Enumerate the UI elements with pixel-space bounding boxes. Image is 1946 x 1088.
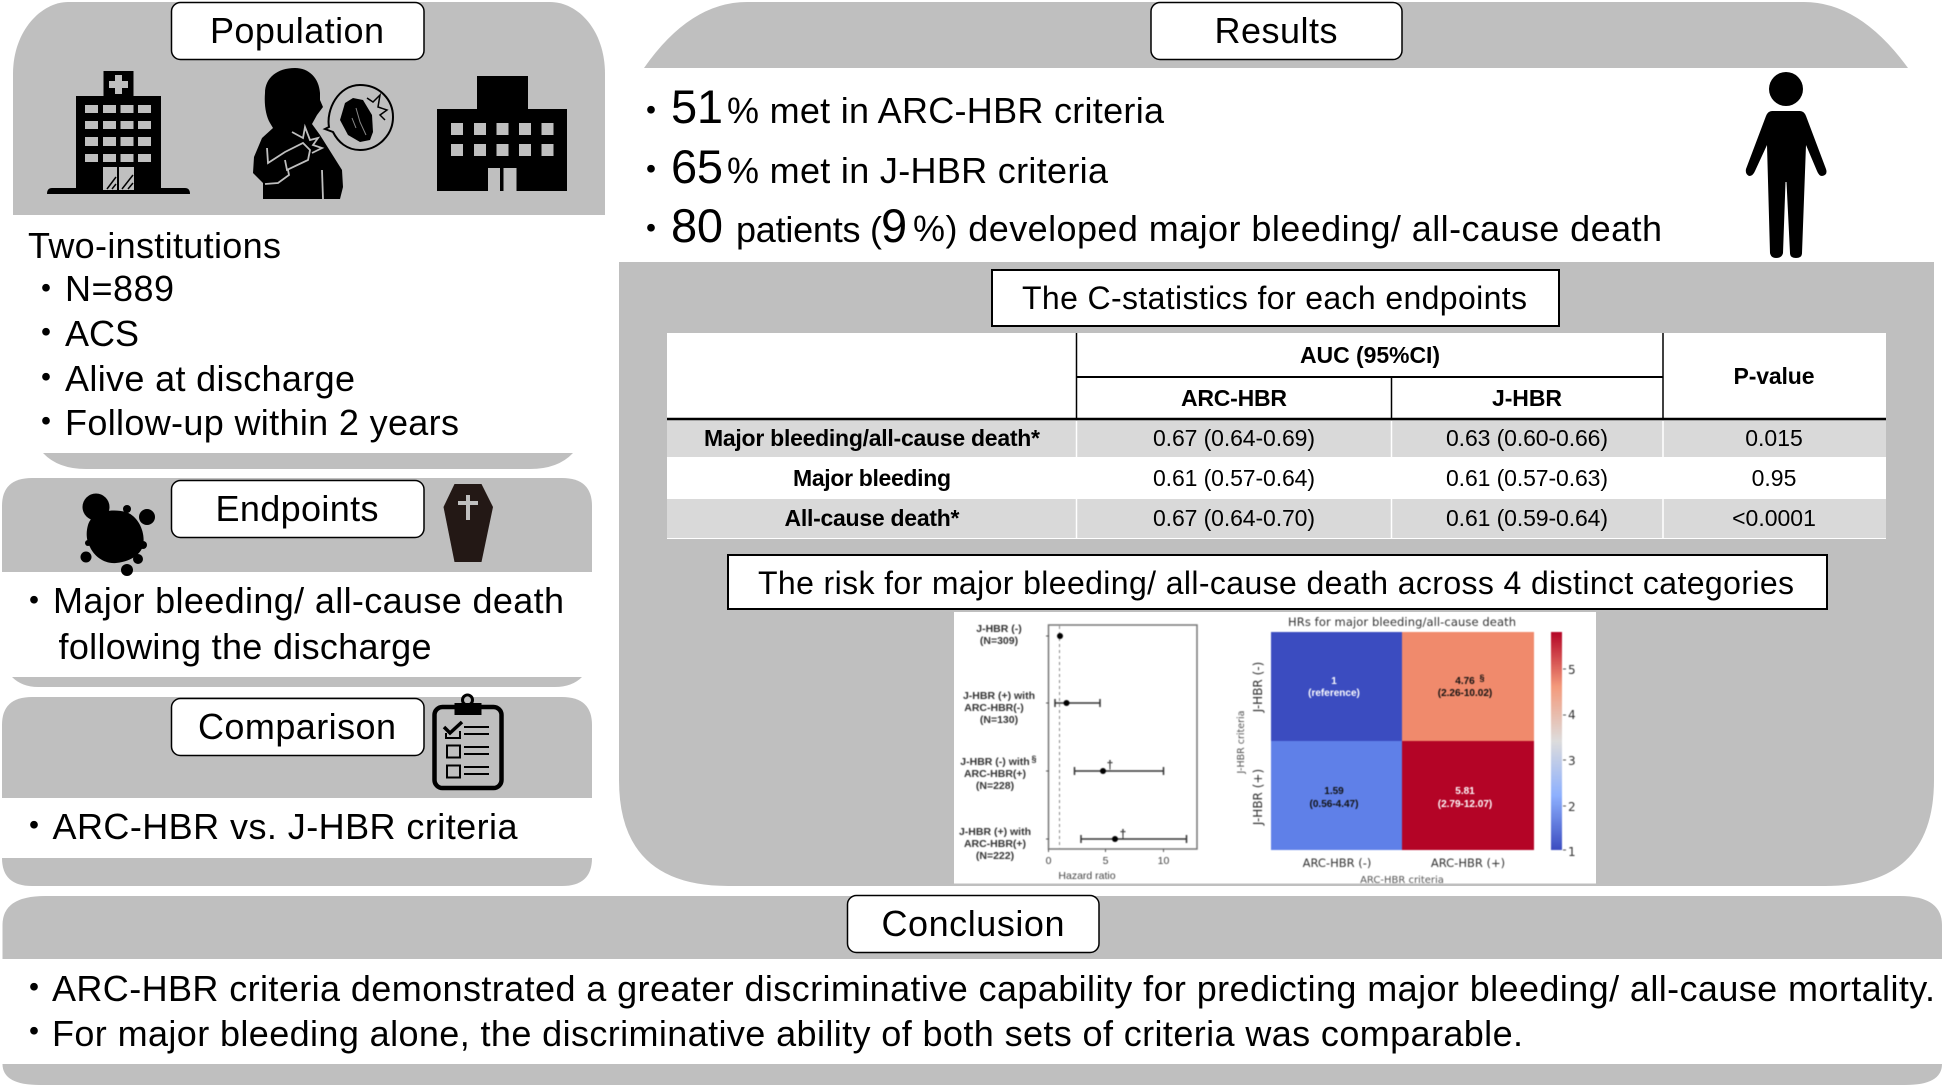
comparison heading <box>172 698 424 756</box>
risk heading <box>728 555 1827 609</box>
results statistics: ・ <box>633 82 669 134</box>
table: C-statistics: J-HBR <box>1492 385 1562 411</box>
endpoints text: Major bleeding/ all-cause death <box>53 580 564 621</box>
heatmap: HRs for major bleeding/all-cause death: 5.81 <box>1455 786 1475 797</box>
comparison text: ・ <box>16 797 52 849</box>
population details: N=889 <box>65 268 174 309</box>
colour bar: 5 <box>1568 663 1576 677</box>
whiskers <box>1055 699 1186 843</box>
forest plot: hazard ratios: ARC-HBR(+) <box>964 838 1026 850</box>
forest plot: hazard ratios: (N=309) <box>980 635 1018 647</box>
comparison footer band <box>2 858 592 886</box>
colour bar: 2 <box>1568 800 1576 814</box>
icon: clipboard checklist <box>434 695 502 788</box>
results statistics: 9 <box>881 199 907 252</box>
table: C-statistics: All-cause death* <box>784 505 960 531</box>
results statistics: % met in J-HBR criteria <box>727 150 1109 191</box>
table: C-statistics: 0.67 (0.64-0.70) <box>1153 505 1315 531</box>
icon: person <box>1746 72 1826 258</box>
population details: ・ <box>28 393 64 445</box>
table: C-statistics: P-value <box>1734 363 1814 389</box>
heatmap cells <box>1271 632 1534 850</box>
results statistics: ・ <box>633 200 669 252</box>
heatmap: HRs for major bleeding/all-cause death: (0.56-4.47) <box>1310 799 1358 810</box>
forest plot: hazard ratios: † <box>1107 758 1113 772</box>
forest plot: hazard ratios: J-HBR (+) with <box>959 826 1031 838</box>
forest plot: hazard ratios: 5 <box>1103 855 1109 867</box>
endpoints heading: Endpoints <box>216 488 378 529</box>
comparison text: ARC-HBR vs. J-HBR criteria <box>52 806 518 847</box>
forest plot: hazard ratios: (N=228) <box>976 780 1014 792</box>
heatmap: HRs for major bleeding/all-cause death: (2.26-10.02) <box>1438 688 1492 699</box>
conclusion text: ARC-HBR criteria demonstrated a greater discriminative capability for predicting major bleeding/ all-cause mortality. <box>52 968 1935 1009</box>
population heading: Population <box>210 10 384 51</box>
endpoints footer band <box>12 677 582 687</box>
endpoints text: ・ <box>16 572 52 624</box>
results statistics: 65 <box>671 140 723 193</box>
results heading: Results <box>1214 10 1338 51</box>
icon: blood splatter <box>80 494 155 576</box>
forest plot: hazard ratios: † <box>1120 827 1126 841</box>
endpoints text <box>16 572 564 667</box>
comparison heading: Comparison <box>198 706 396 747</box>
panel: comparison <box>2 695 592 886</box>
conclusion text: ・ <box>16 1003 52 1055</box>
heatmap: HRs for major bleeding/all-cause death: (2.79-12.07) <box>1438 799 1492 810</box>
forest plot: hazard ratios: 10 <box>1158 855 1169 867</box>
table: C-statistics: 0.61 (0.57-0.63) <box>1446 465 1608 491</box>
icon: institution building <box>437 76 567 191</box>
results statistics: 51 <box>671 80 723 133</box>
comparison header band <box>2 697 592 798</box>
heatmap: HRs for major bleeding/all-cause death: § <box>1479 673 1485 683</box>
heatmap axis labels: J-HBR (-) <box>1251 662 1265 713</box>
forest plot: hazard ratios: (N=130) <box>980 714 1018 726</box>
conclusion header band <box>2 896 1942 959</box>
panel: conclusion <box>2 896 1942 1085</box>
colour bar: 3 <box>1568 754 1576 768</box>
heatmap title: HRs for major bleeding/all-cause death <box>1288 615 1516 629</box>
figure background <box>954 612 1596 884</box>
heatmap axis labels: J-HBR (+) <box>1251 769 1265 826</box>
endpoints text: following the discharge <box>58 626 432 667</box>
forest plot: hazard ratios: 0 <box>1046 855 1052 867</box>
forest plot: hazard ratios: Hazard ratio <box>1058 870 1116 882</box>
results heading <box>1151 2 1402 60</box>
icon: coffin <box>444 484 493 562</box>
forest plot: hazard ratios: ARC-HBR(+) <box>964 768 1026 780</box>
risk heading: The risk for major bleeding/ all-cause death across 4 distinct categories <box>758 565 1794 601</box>
conclusion heading <box>848 896 1099 952</box>
table: C-statistics: Major bleeding <box>793 465 951 491</box>
endpoints header band <box>2 478 592 572</box>
heatmap: HRs for major bleeding/all-cause death: 4.76 <box>1455 676 1475 687</box>
table: C-statistics: ARC-HBR <box>1181 385 1287 411</box>
table: C-statistics: 0.95 <box>1752 465 1796 491</box>
icon: patient with chest pain <box>253 68 393 199</box>
forest plot: hazard ratios <box>959 623 1197 882</box>
heatmap: HRs for major bleeding/all-cause death: 1 <box>1331 676 1337 687</box>
heatmap axis labels: ARC-HBR (-) <box>1303 856 1371 870</box>
results statistics: %) developed major bleeding/ all-cause death <box>913 208 1662 249</box>
c-statistics heading <box>992 270 1559 326</box>
conclusion text: For major bleeding alone, the discriminative ability of both sets of criteria was comparable. <box>52 1013 1523 1054</box>
forest plot: hazard ratios: § <box>1031 754 1037 764</box>
table: C-statistics: 0.61 (0.59-0.64) <box>1446 505 1608 531</box>
table: C-statistics: 0.61 (0.57-0.64) <box>1153 465 1315 491</box>
conclusion text: ・ <box>16 959 52 1011</box>
heatmap axis labels: J-HBR criteria <box>1236 711 1247 774</box>
forest plot: hazard ratios: J-HBR (+) with <box>963 690 1035 702</box>
results statistics: ・ <box>633 141 669 193</box>
forest plot: hazard ratios: ARC-HBR(-) <box>964 702 1024 714</box>
colour bar: 4 <box>1568 708 1576 722</box>
forest plot: hazard ratios: J-HBR (-) with <box>960 756 1030 768</box>
population details: ・ <box>28 304 64 356</box>
population details: ACS <box>65 313 139 354</box>
speech bubble <box>325 85 393 150</box>
panel: endpoints <box>2 478 592 687</box>
population footer band <box>43 453 573 469</box>
colour bar: 1 <box>1568 845 1576 859</box>
panel: population <box>13 2 605 469</box>
table: C-statistics: 0.67 (0.64-0.69) <box>1153 425 1315 451</box>
conclusion heading: Conclusion <box>882 903 1064 944</box>
table: C-statistics: AUC (95%CI) <box>1300 342 1440 368</box>
conclusion footer band <box>2 1064 1942 1085</box>
results statistics: % met in ARC-HBR criteria <box>727 90 1165 131</box>
endpoints heading <box>172 480 424 538</box>
population details: Alive at discharge <box>65 358 355 399</box>
results statistics: 80 <box>671 199 723 252</box>
table: C-statistics <box>667 333 1886 539</box>
heatmap: HRs for major bleeding/all-cause death: (reference) <box>1308 688 1360 699</box>
heatmap: HRs for major bleeding/all-cause death <box>1236 615 1576 886</box>
conclusion text <box>16 959 1935 1055</box>
forest plot: hazard ratios: (N=222) <box>976 850 1014 862</box>
plot frame <box>1048 625 1197 849</box>
population details: ・ <box>28 349 64 401</box>
population heading <box>172 2 424 60</box>
table: C-statistics: Major bleeding/all-cause death* <box>704 425 1040 451</box>
forest plot: hazard ratios: J-HBR (-) <box>976 623 1022 635</box>
results statistics <box>633 80 1662 252</box>
heatmap axis labels: ARC-HBR criteria <box>1360 875 1444 886</box>
population details <box>28 225 459 445</box>
heatmap axis labels <box>1236 662 1505 886</box>
table: C-statistics: 0.63 (0.60-0.66) <box>1446 425 1608 451</box>
population details: ・ <box>28 260 64 312</box>
heatmap axis labels: ARC-HBR (+) <box>1431 856 1505 870</box>
results header band <box>644 2 1908 68</box>
heatmap: HRs for major bleeding/all-cause death: 1.59 <box>1324 786 1344 797</box>
icon: hospital with cross <box>47 71 190 194</box>
results statistics: patients ( <box>736 209 882 250</box>
population details: Two-institutions <box>28 225 281 266</box>
c-statistics heading: The C-statistics for each endpoints <box>1022 280 1527 316</box>
colour bar <box>1551 632 1576 859</box>
table: C-statistics: 0.015 <box>1745 425 1803 451</box>
population header band <box>13 2 605 215</box>
table: C-statistics: <0.0001 <box>1732 505 1816 531</box>
population details: Follow-up within 2 years <box>65 402 459 443</box>
panel: results <box>619 2 1934 886</box>
icon: heart <box>340 98 373 142</box>
results main panel <box>619 262 1934 886</box>
